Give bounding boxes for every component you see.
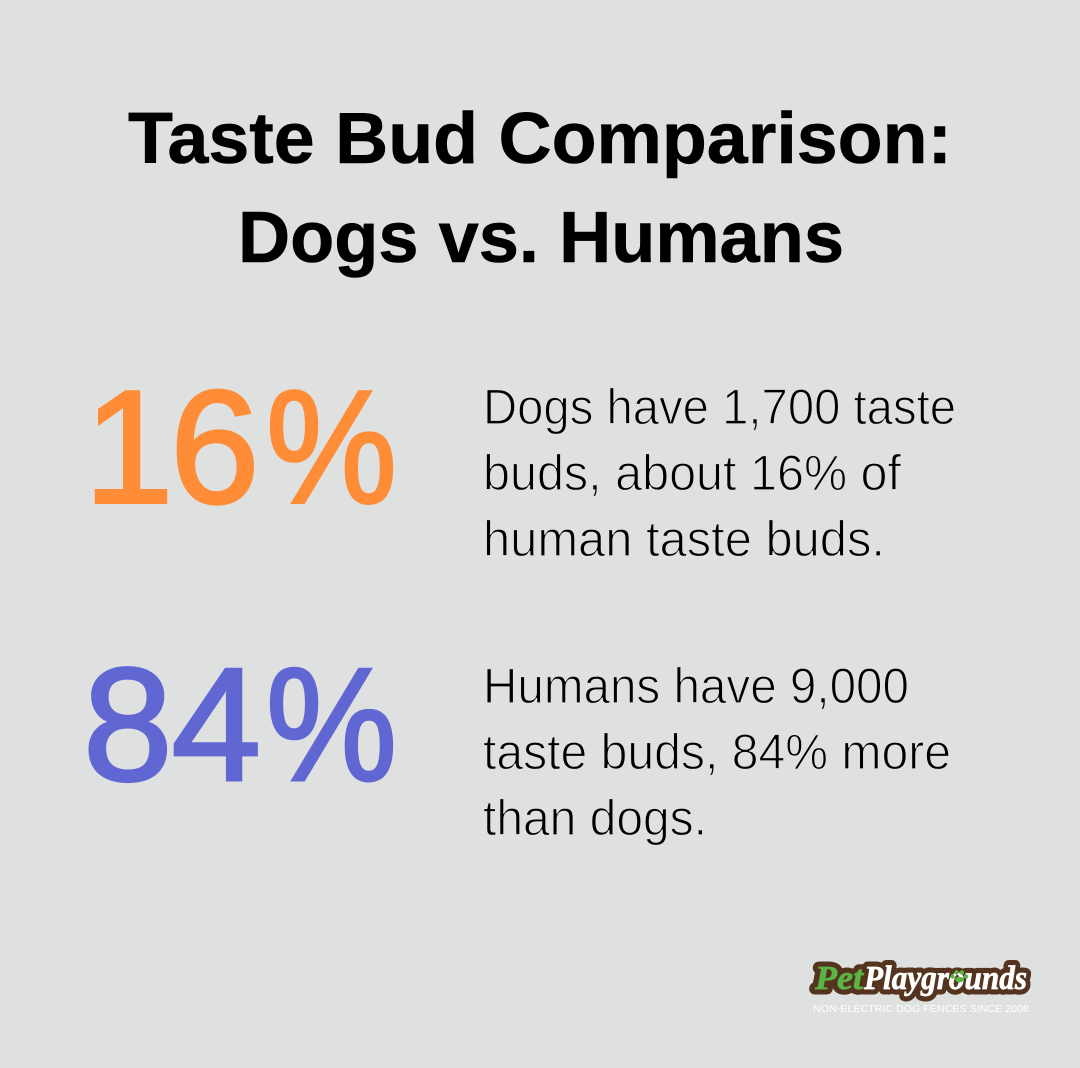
logo wordmark: Playgrounds bbox=[863, 960, 1027, 997]
logo outline: Pet bbox=[814, 960, 865, 997]
text: dogs taste buds: buds, about 16% of bbox=[483, 445, 901, 501]
text: humans taste buds bbox=[483, 658, 951, 846]
logo wordmark: Pet bbox=[814, 960, 865, 997]
logo tagline: NON-ELECTRIC DOG FENCES SINCE 2008 bbox=[813, 1003, 1029, 1015]
stat: 16%: 1 bbox=[84, 358, 174, 538]
title: Taste Bud Comparison: bbox=[128, 99, 952, 179]
stat: 84%: % bbox=[266, 635, 397, 815]
text: humans taste buds: than dogs. bbox=[483, 790, 707, 846]
logo outline: Playgrounds bbox=[863, 960, 1027, 997]
text: dogs taste buds: human taste buds. bbox=[483, 511, 885, 567]
stat: 16%: % bbox=[266, 358, 397, 538]
text: humans taste buds: Humans have 9,000 bbox=[483, 658, 909, 714]
stat: 16%: 6 bbox=[170, 358, 260, 538]
icon: paw bbox=[950, 970, 968, 982]
stat: 84% bbox=[83, 635, 397, 815]
stat: 16% bbox=[84, 358, 397, 538]
logo: Pet Playgrounds bbox=[813, 960, 1029, 1015]
title bbox=[128, 99, 952, 278]
stat: 84%: 4 bbox=[172, 635, 261, 815]
stat: 84%: 8 bbox=[83, 635, 173, 815]
title: Dogs vs. Humans bbox=[238, 198, 844, 278]
text: dogs taste buds: Dogs have 1,700 taste bbox=[483, 379, 956, 435]
text: humans taste buds: taste buds, 84% more bbox=[483, 724, 951, 780]
text: dogs taste buds bbox=[483, 379, 956, 567]
